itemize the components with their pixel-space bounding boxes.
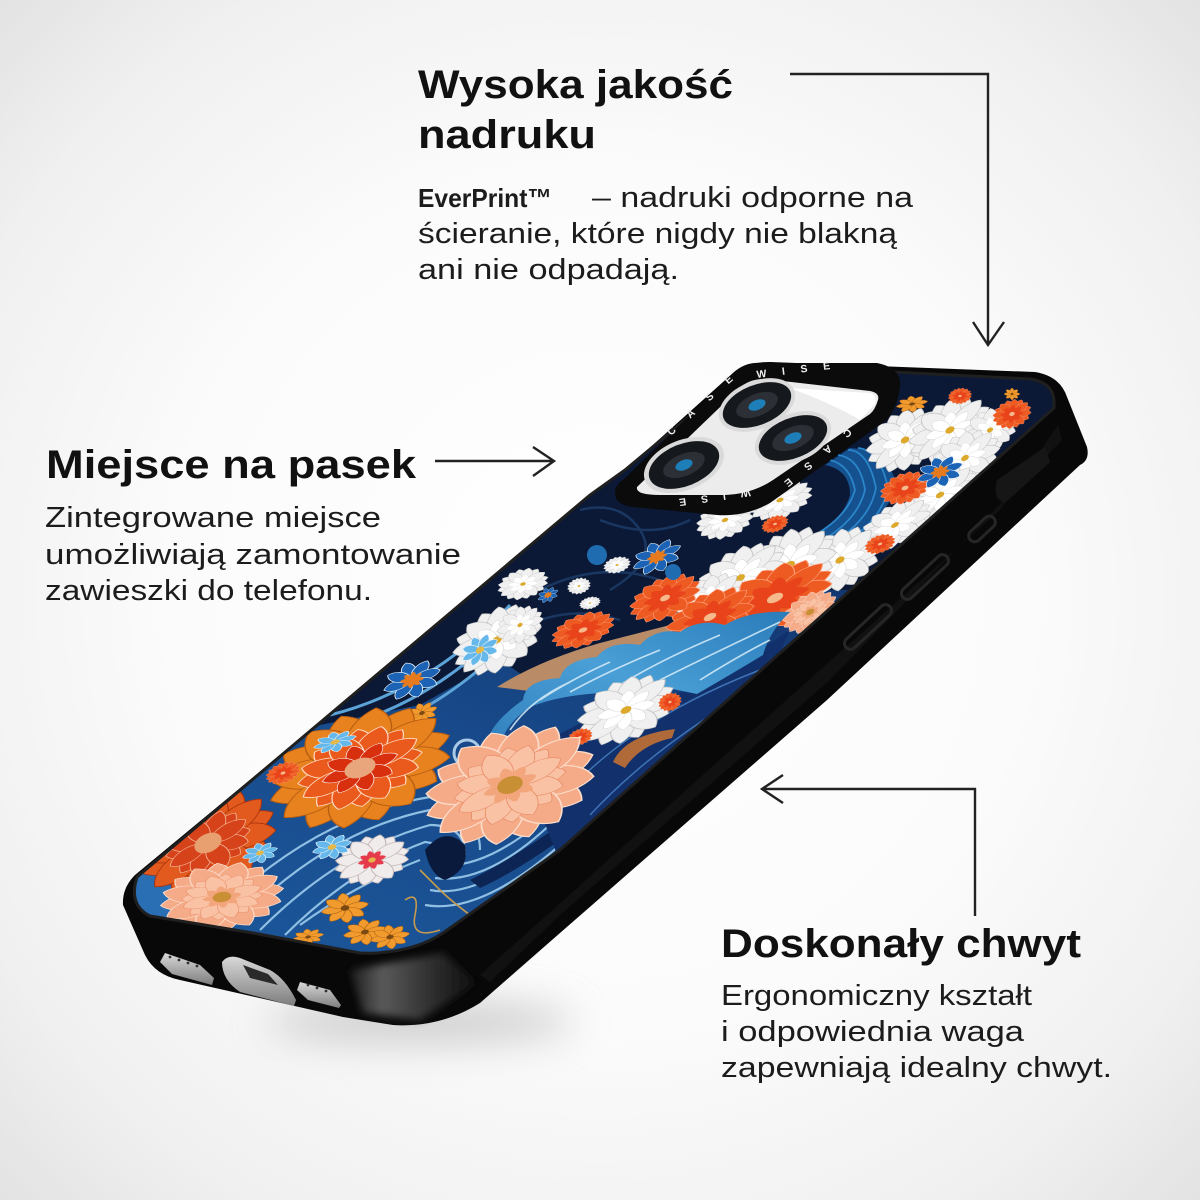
body text [45,502,461,607]
scattered blossoms [992,399,1032,429]
feather wave [490,612,790,735]
arrow: to strap slot [435,447,554,476]
arrow: to top edge [790,74,1004,345]
bottom ports [160,953,341,1008]
body text: zawieszki do telefonu. [45,575,372,607]
big peach flower [425,725,595,845]
camera window [637,379,878,495]
big orange flower [270,707,450,829]
body text: zapewniają idealny chwyt. [721,1052,1112,1084]
navy base [312,374,1052,731]
peach flower lower left [160,862,284,928]
lens left [636,426,732,504]
middle white row [823,526,878,592]
camera module [615,360,900,515]
bottom-left blue patch [136,874,172,917]
body text: Zintegrowane miejsce [45,502,381,534]
large swirl waves [140,797,560,935]
dark swirl hollow [425,836,466,880]
phone case illustration [100,350,1100,1025]
rim lettering: C A S E [665,373,735,438]
body text [418,182,914,286]
heading: Wysoka jakość [418,63,733,107]
orange row [736,560,832,626]
lens top [711,368,803,442]
side buttons [842,514,998,652]
body text: ścieranie, które nigdy nie blakną [418,218,898,250]
body text: Ergonomiczny kształt [721,980,1032,1012]
side switch bump [996,447,1050,503]
body text [721,980,1112,1084]
heading [418,63,733,157]
body text: EverPrint™ [418,183,552,213]
white daisy [577,674,674,746]
charging port [222,957,296,1006]
rim lettering: C A S E [782,426,854,489]
rim lettering [665,360,854,508]
body text: – nadruki odporne na [592,182,914,214]
peacock flower [452,604,542,676]
art rim [134,372,1054,953]
body text: umożliwiają zamontowanie [45,539,461,571]
left wave [330,604,511,716]
copper swirl [613,729,675,768]
red flower [143,792,276,888]
callout: strap slot [45,443,461,607]
side shading [480,425,1062,982]
gold script [405,870,470,933]
speaker right [297,982,341,1008]
deep blue band [545,630,790,851]
printed art [136,374,1052,952]
top wave [823,448,894,537]
heading: Miejsce na pasek [46,443,417,487]
body text: ani nie odpadają. [418,254,679,286]
glossy corner highlight [350,953,477,1020]
heading: nadruku [418,113,596,157]
speaker left [160,953,214,985]
camera rim [615,363,900,515]
case body [123,362,1088,1025]
callout: grip [721,922,1112,1084]
callout: print quality [418,63,914,286]
dark section flowers [498,568,548,600]
lower blue field [138,590,848,952]
phone drop shadow [265,1000,575,1044]
rim lettering: W I S E [678,486,751,508]
lens right [747,401,839,475]
window shine [790,388,876,420]
top white flowers [866,408,932,472]
arrow: to case side [762,775,975,916]
tan wave crest [497,626,672,691]
small flowers bottom [334,834,410,886]
dark swirls [540,506,690,621]
small swirl [454,740,480,766]
rim lettering: W I S E [756,360,831,381]
body text: i odpowiednia waga [721,1016,1025,1048]
heading: Doskonały chwyt [721,922,1081,966]
